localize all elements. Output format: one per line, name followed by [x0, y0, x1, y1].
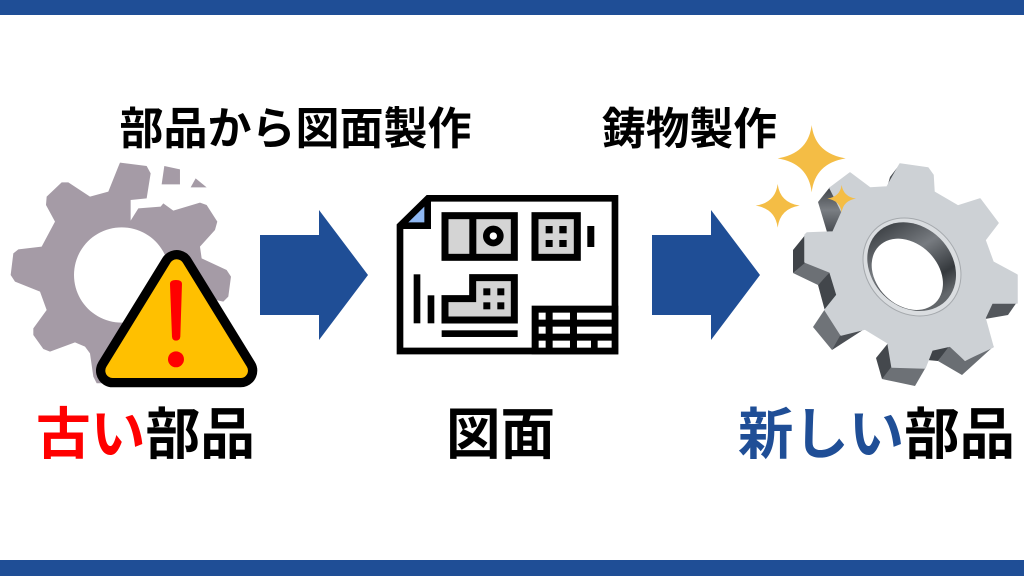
icon: new metal gear with sparkles: [756, 125, 1017, 386]
dimension bars: [414, 274, 518, 337]
part section C: [445, 278, 514, 320]
title block table: [532, 306, 618, 354]
icon: broken old gear with warning: [11, 163, 241, 383]
heading: drawing production from part: 部品から図面製作: [120, 105, 472, 154]
label: drawing: 図面: [446, 403, 555, 466]
top bar: [0, 0, 1024, 15]
broken gear body: [11, 163, 231, 383]
large sparkle: [778, 125, 846, 192]
gear side faces: [793, 164, 1017, 386]
bottom bar: [0, 560, 1024, 576]
warning triangle: [113, 267, 241, 371]
folded corner: [408, 207, 424, 222]
sheet outline: [397, 195, 618, 354]
small sparkle: [756, 184, 800, 228]
gear hole opening: [857, 224, 957, 324]
icon: blueprint drawing: [397, 195, 618, 354]
part section A: [445, 216, 514, 257]
tiny sparkle: [827, 185, 856, 212]
arrow: old part to drawing: [260, 210, 368, 340]
gear fragment: [162, 166, 180, 184]
exclamation mark: [168, 280, 184, 367]
gear hole wall: [849, 204, 974, 329]
heading: casting production: 鋳物製作: [602, 105, 777, 154]
gear hub rim: [843, 198, 981, 336]
gear fragment small: [191, 178, 207, 187]
gear top face: [805, 164, 1017, 368]
arrow: drawing to new part: [652, 210, 760, 340]
label: new part: 新しい部品: [738, 403, 1015, 466]
part section B: [535, 216, 594, 257]
label: old part: 古い部品: [36, 403, 255, 466]
